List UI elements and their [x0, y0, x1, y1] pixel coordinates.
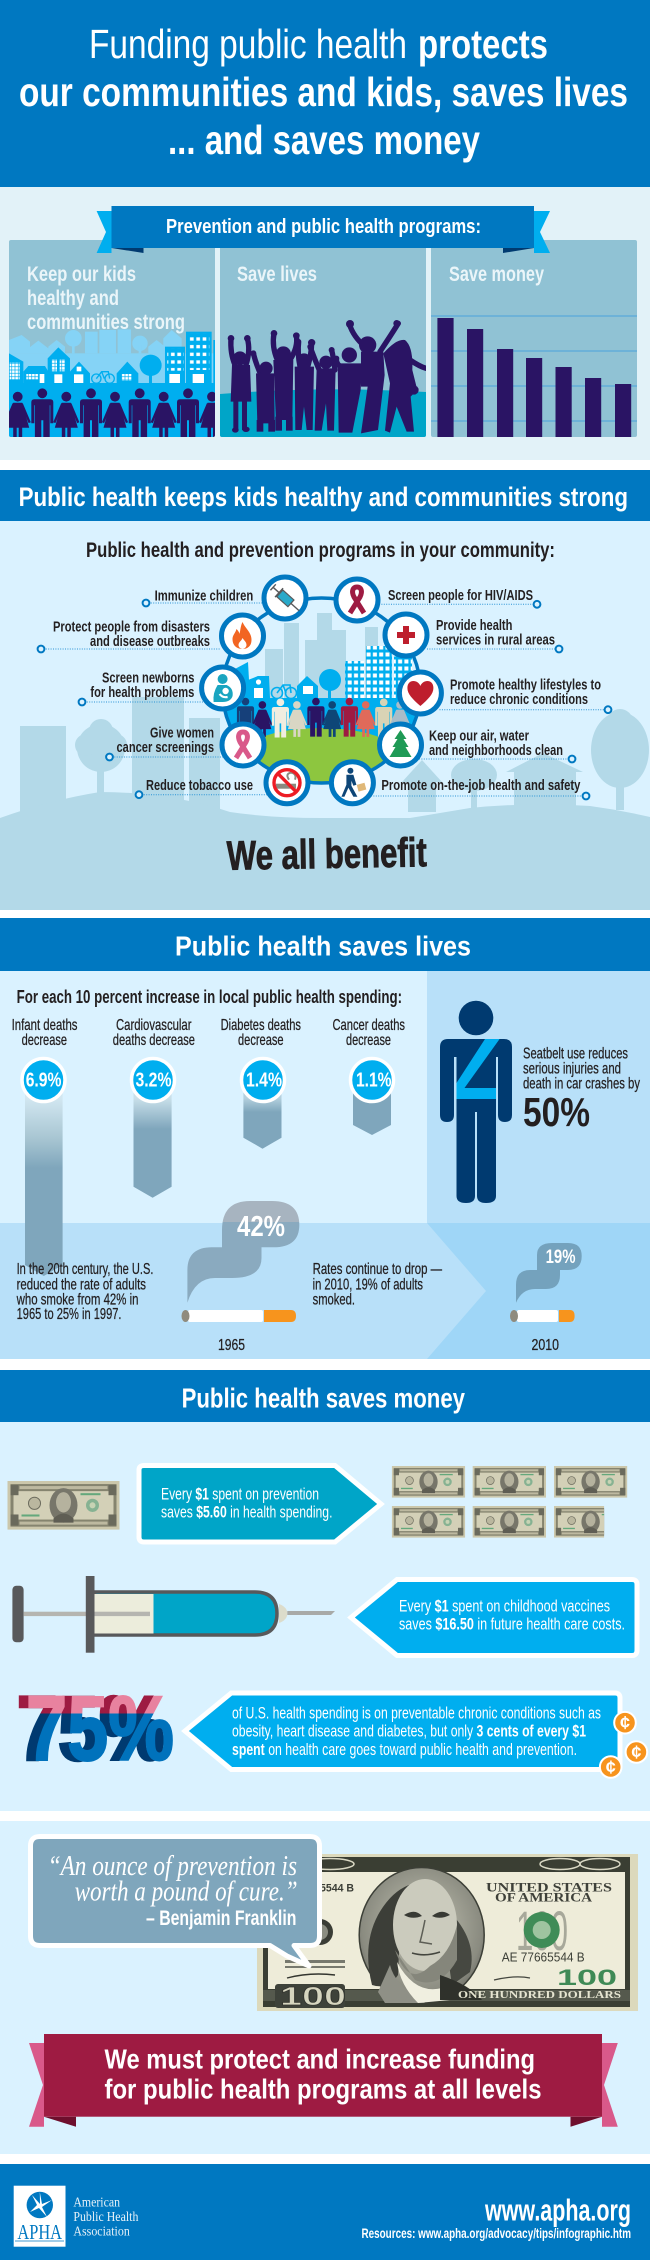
label: screen newborns: Screen newborns — [102, 670, 194, 687]
smoking text 1965: reduced the rate of adults — [17, 1276, 146, 1293]
title banner: ... and saves money — [168, 117, 480, 163]
smoking text 2010 — [313, 1261, 442, 1308]
we all benefit: We all benefit — [226, 829, 427, 879]
association name: American — [73, 2196, 120, 2211]
label: reduce tobacco: Reduce tobacco use — [146, 777, 253, 794]
callout: vaccines savings — [351, 1580, 637, 1656]
hundred dollar bill: 100 — [516, 1899, 568, 1962]
smoking text 2010: Rates continue to drop — — [313, 1261, 442, 1278]
label: protect people: and disease outbreaks — [90, 633, 210, 650]
label: screen newborns — [79, 670, 203, 705]
smoking text 2010: in 2010, 19% of adults — [313, 1276, 423, 1293]
ribbon: call to action — [29, 2034, 618, 2127]
panel: save lives — [220, 240, 426, 437]
speech bubble quote: worth a pound of cure.” — [75, 1877, 298, 1908]
icon: one dollar bill — [8, 1481, 120, 1530]
icon: syringe — [12, 1576, 335, 1653]
label: HIV/AIDS — [379, 587, 540, 608]
speech bubble quote: – Benjamin Franklin — [146, 1907, 296, 1930]
ribbon: call to action: for public health programs at all levels — [104, 2074, 542, 2105]
icon: cent coins — [600, 1712, 647, 1778]
stat: cardiovascular deaths: deaths decrease — [113, 1032, 195, 1049]
smoking text 1965: who smoke from 42% in — [16, 1291, 139, 1308]
footer — [0, 2164, 650, 2260]
stat: cancer deaths — [332, 1017, 405, 1135]
section heading — [0, 1370, 650, 1422]
icon: person with seatbelt — [440, 1001, 512, 1203]
icon: cent coins: ¢ — [620, 1713, 630, 1733]
cigarette 2010 with smoke: 2010 — [532, 1337, 559, 1354]
smoking text 1965 — [16, 1261, 153, 1323]
label: clean air and water: and neighborhoods clean — [429, 742, 563, 759]
association name — [73, 2196, 138, 2239]
hundred dollar bill: UNITED STATES — [486, 1880, 612, 1895]
label: rural health services: Provide health — [436, 617, 512, 634]
icon: syringe — [264, 577, 306, 619]
label: clean air and water: Keep our air, water — [429, 728, 529, 745]
stat: infant deaths — [12, 1017, 78, 1276]
stat: cancer deaths: 1.1% — [356, 1070, 392, 1092]
label: HIV/AIDS: Screen people for HIV/AIDS — [388, 587, 533, 604]
label: protect people — [38, 619, 220, 652]
label: on-the-job safety: Promote on-the-job health and safety — [381, 777, 581, 794]
icon: flame — [222, 615, 264, 657]
icon: heart — [399, 672, 441, 714]
association name: Public Health — [73, 2210, 138, 2225]
label: protect people: Protect people from disasters — [53, 619, 210, 636]
panel: keep kids and communities strong: communities strong — [27, 311, 185, 334]
stat: infant deaths: Infant deaths — [12, 1017, 78, 1034]
cigarette 1965 with smoke: 42% — [237, 1211, 285, 1243]
section heading — [0, 918, 650, 971]
icon: tree — [380, 724, 422, 766]
stat: cardiovascular deaths: Cardiovascular — [116, 1017, 192, 1034]
subheading: For each 10 percent increase in local public health spending: — [17, 987, 402, 1007]
icon: cent coins: ¢ — [606, 1757, 616, 1777]
hundred dollar bill: AE 77665544 B — [502, 1950, 585, 1965]
label: healthy lifestyles: reduce chronic conditions — [450, 691, 588, 708]
big number 75%: 75% — [26, 1678, 174, 1780]
icon: pink ribbon — [222, 724, 264, 766]
hundred dollar bill: 5544 B — [320, 1883, 354, 1895]
association name: Association — [73, 2224, 130, 2239]
smoking text 2010: smoked. — [313, 1291, 355, 1308]
section: saves money — [0, 1370, 650, 1811]
speech bubble quote: “An ounce of prevention is — [48, 1851, 297, 1882]
section heading — [0, 470, 650, 521]
website and resources — [362, 2193, 631, 2241]
stat: diabetes deaths: 1.4% — [246, 1070, 282, 1092]
label: women cancer screenings — [106, 725, 226, 760]
cigarette 2010 with smoke: 19% — [546, 1247, 576, 1268]
stat: infant deaths: decrease — [22, 1032, 67, 1049]
panel: save money bar chart: Save money — [449, 263, 544, 286]
community scene inside ring — [223, 596, 420, 785]
panel: keep kids and communities strong: healthy and — [27, 287, 119, 310]
hundred dollar bill — [257, 1854, 638, 2011]
icon: no smoking — [266, 762, 308, 804]
seatbelt text — [523, 1045, 640, 1135]
callout: chronic conditions spending: obesity, heart disease and diabetes, but only 3 cents of every $1 — [232, 1723, 586, 1741]
stat: diabetes deaths: Diabetes deaths — [221, 1017, 301, 1034]
ribbon: call to action: We must protect and increase funding — [104, 2044, 535, 2075]
ribbon: prevention and public health programs — [97, 206, 550, 253]
hundred dollar bill: OF AMERICA — [495, 1890, 593, 1905]
panel: keep kids and communities strong: Keep our kids — [27, 263, 136, 286]
panel: prevention and public health programs — [0, 187, 650, 460]
label: immunize children: Immunize children — [155, 588, 253, 605]
background city landscape — [0, 613, 650, 910]
cigarette 1965 with smoke: 1965 — [218, 1337, 245, 1354]
label: on-the-job safety — [371, 777, 589, 799]
label: healthy lifestyles: Promote healthy lifestyles to — [450, 677, 601, 694]
icon: cent coins: ¢ — [631, 1742, 641, 1762]
stat: cancer deaths: Cancer deaths — [332, 1017, 405, 1034]
label: healthy lifestyles — [440, 677, 611, 713]
label: clean air and water — [419, 728, 575, 762]
stat: cancer deaths: decrease — [346, 1032, 391, 1049]
section: saves lives — [0, 918, 650, 1359]
APHA logo: APHA — [17, 2220, 63, 2244]
label: immunize children — [143, 588, 262, 606]
cigarette 1965 with smoke — [182, 1201, 299, 1354]
panel: save lives: Save lives — [237, 263, 317, 286]
smoking text 1965: 1965 to 25% in 1997. — [17, 1306, 122, 1323]
callout: prevention savings: Every $1 spent on prevention — [161, 1485, 319, 1503]
smoking text 1965: In the 20th century, the U.S. — [17, 1261, 153, 1278]
callout: prevention savings — [139, 1466, 381, 1542]
icon: walking worker — [331, 762, 373, 804]
label: screen newborns: for health problems — [90, 684, 194, 701]
section heading: Public health saves money — [182, 1382, 465, 1413]
hundred dollar bill: 100 — [557, 1965, 617, 1990]
APHA logo — [14, 2186, 65, 2247]
hundred dollar bill: 100 — [280, 1981, 346, 2011]
section: closing quote and call to action — [0, 1821, 650, 2154]
label: reduce tobacco — [136, 777, 267, 798]
icon: medical cross — [385, 614, 427, 656]
icon: red ribbon — [336, 579, 378, 621]
speech bubble quote — [30, 1836, 320, 1966]
label: women cancer screenings: cancer screenings — [116, 739, 214, 756]
section heading: Public health saves lives — [175, 931, 471, 962]
big number 75%: 75% — [17, 1678, 165, 1780]
ribbon: prevention and public health programs: Prevention and public health programs: — [166, 215, 481, 238]
hundred dollar bill: ONE HUNDRED DOLLARS — [458, 1990, 621, 2001]
panel: keep kids and communities strong — [5, 240, 224, 438]
stat: diabetes deaths: decrease — [238, 1032, 284, 1049]
stat: diabetes deaths — [221, 1017, 301, 1149]
label: women cancer screenings: Give women — [150, 725, 214, 742]
title banner: protects — [418, 21, 548, 67]
stat: cardiovascular deaths — [113, 1017, 195, 1198]
callout: prevention savings: saves $5.60 in health spending. — [161, 1503, 332, 1521]
title banner: Funding public health — [89, 21, 407, 67]
icon: mother and baby — [202, 667, 244, 709]
title banner — [0, 0, 650, 187]
label: rural health services: services in rural areas — [436, 631, 555, 648]
seatbelt text: 50% — [523, 1089, 590, 1135]
callout: chronic conditions spending — [185, 1693, 620, 1770]
stat: cardiovascular deaths: 3.2% — [136, 1070, 172, 1092]
label: rural health services — [427, 617, 562, 652]
section: keeps kids healthy and communities strong — [0, 470, 650, 910]
icon: six dollar bills — [392, 1466, 627, 1538]
cigarette 2010 with smoke — [510, 1243, 582, 1354]
stat: infant deaths: 6.9% — [26, 1070, 62, 1092]
panel: save money bar chart — [431, 240, 637, 437]
